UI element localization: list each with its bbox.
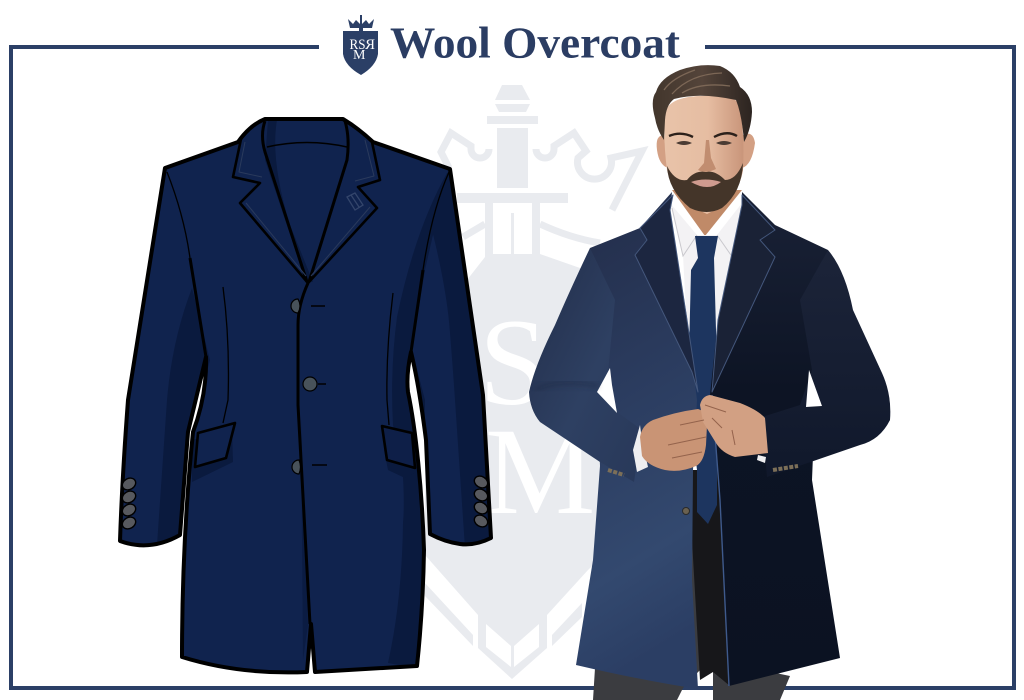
watermark: shield outer stripes (425, 583, 582, 646)
coat button (682, 508, 690, 514)
lapels (635, 195, 775, 392)
right sleeve buttons (472, 474, 490, 529)
logo monogram: R (365, 37, 375, 53)
placket (298, 283, 310, 624)
logo monogram: RS (350, 37, 366, 53)
coat right panel (710, 192, 840, 686)
front buttons (291, 299, 317, 474)
illustration: navy overcoat (120, 119, 495, 672)
trouser shadow (688, 470, 730, 686)
hair highlights (664, 70, 730, 94)
ears (657, 134, 755, 168)
coat outline (120, 119, 491, 672)
collar and lapels (233, 121, 380, 283)
finger lines (668, 405, 735, 458)
logo monogram (350, 37, 375, 63)
arm gaps (597, 368, 822, 413)
coat left panel (576, 192, 698, 689)
right arm (762, 250, 890, 477)
beard (667, 163, 743, 212)
mouth (691, 180, 721, 187)
nose shadow (698, 140, 716, 172)
shirt collar lines (672, 208, 741, 258)
watermark: letter M: M (485, 403, 595, 540)
neck (672, 190, 742, 236)
coat silhouette (120, 119, 491, 672)
photo: man wearing wool overcoat (529, 65, 890, 700)
lapel buttonhole (347, 193, 363, 210)
watermark: shield (425, 254, 640, 679)
eyes (676, 141, 732, 145)
watermark: brand crest (425, 85, 642, 679)
watermark: letter S: S (479, 294, 548, 431)
shirt cuffs (633, 425, 766, 472)
tie (688, 236, 718, 524)
buttonholes (311, 306, 327, 465)
logo crown (348, 15, 374, 32)
logo (343, 15, 378, 75)
flap pockets (195, 423, 415, 468)
watermark: crown tower (457, 85, 568, 254)
header (343, 15, 680, 75)
shirt (670, 203, 742, 330)
logo shield (343, 31, 378, 75)
left hand (640, 409, 707, 471)
seams and darts (167, 172, 449, 425)
left arm fold (535, 383, 598, 390)
front edge (712, 395, 729, 686)
logo monogram: M (353, 48, 366, 63)
left sleeve buttons (120, 476, 138, 531)
left arm (529, 248, 642, 482)
cuff buttons (608, 466, 798, 475)
watermark: crown arms (441, 133, 642, 243)
hair (653, 65, 752, 142)
right hand (700, 395, 768, 457)
title: Wool Overcoat (390, 18, 680, 68)
face (664, 96, 743, 214)
brows (669, 133, 737, 137)
trousers (593, 500, 790, 700)
coat shading (157, 120, 495, 670)
